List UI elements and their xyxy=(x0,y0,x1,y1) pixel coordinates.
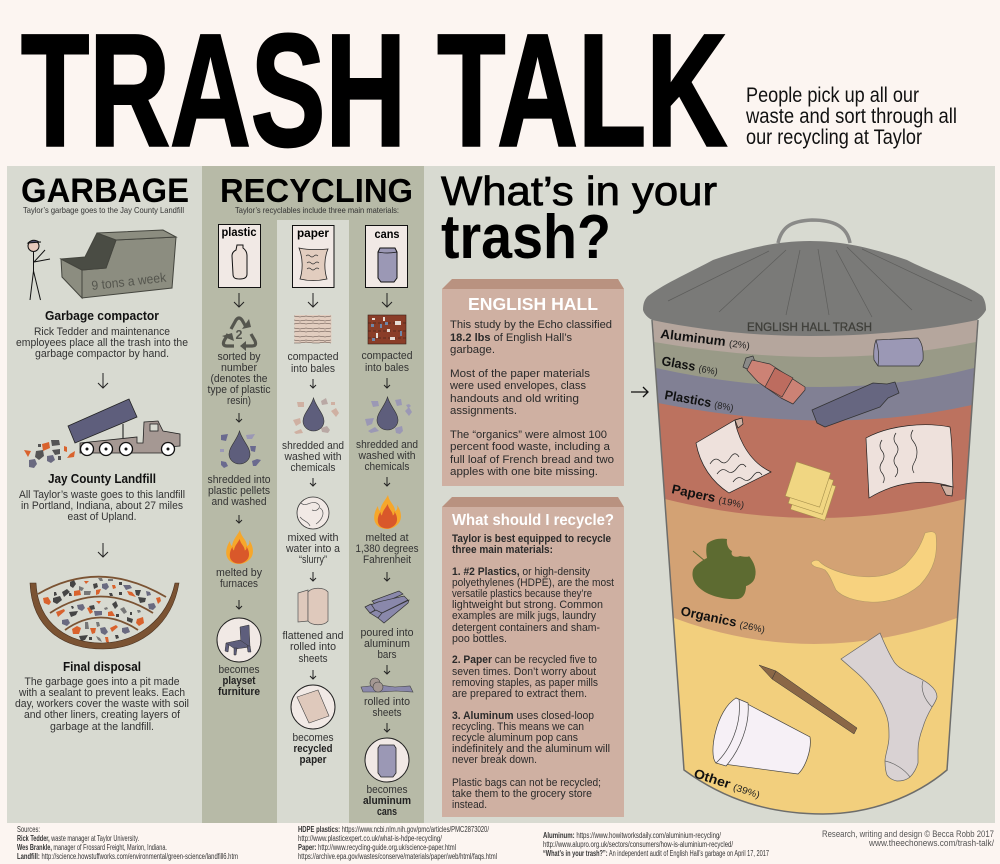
text: becomes aluminum cans: becomes xyxy=(366,784,408,796)
text: flattened: rolled into xyxy=(290,641,336,653)
column: cans xyxy=(356,226,419,818)
icon: shredding drop xyxy=(220,431,261,468)
item: pencil xyxy=(759,665,857,734)
text: recycle guide: lightweight but strong. Common xyxy=(452,599,603,611)
panel: what's in your trash xyxy=(424,166,995,823)
label: plastics: Plastics (8%) xyxy=(663,387,735,414)
heading xyxy=(441,168,717,272)
icon: garbage compactor: 9 tons a week xyxy=(91,270,167,293)
text: recycle guide: seven times. Don’t worry about xyxy=(452,666,596,678)
text: study: This study by the Echo classified xyxy=(450,319,612,331)
heading: What’s in your xyxy=(441,168,717,214)
text: compacted: into bales xyxy=(291,363,336,375)
text: becomes playset furniture: furniture xyxy=(218,686,260,698)
recycling subtitle: Taylor’s recyclables include three main materials: xyxy=(235,205,399,215)
text: compacted xyxy=(362,350,412,374)
tagline: our recycling at Taylor xyxy=(746,126,922,149)
garbage subtitle: Taylor’s garbage goes to the Jay County Landfill xyxy=(23,205,184,215)
icon: slurry xyxy=(297,497,329,529)
text: melted: melted by xyxy=(216,567,263,579)
text: recycle guide: versatile plastics because they’re xyxy=(452,588,592,600)
item: aluminum can xyxy=(874,338,923,366)
text: shredded: shredded into xyxy=(208,474,270,486)
paper card: paper xyxy=(297,228,330,240)
icon: landfill pit xyxy=(30,577,179,649)
text: shredded: shredded and xyxy=(282,440,344,452)
column: paper xyxy=(282,226,344,766)
trash can xyxy=(640,220,990,820)
text: flattened: flattened and xyxy=(282,630,344,642)
text: recycle guide: Taylor is best equipped to recycle xyxy=(452,533,611,545)
text: study: The “organics” were almost 100 xyxy=(450,429,607,441)
item: yellow paper stack xyxy=(782,462,839,520)
text: slurry: “slurry” xyxy=(299,554,327,566)
text: final disposal: garbage at the landfill. xyxy=(50,721,154,733)
text: recycle guide xyxy=(452,533,614,811)
cans card xyxy=(366,226,408,288)
text: final disposal: Final disposal xyxy=(63,660,141,674)
text: recycle guide: never break down. xyxy=(452,754,537,766)
arrow xyxy=(98,543,108,557)
footer: aluminum sources: “What’s in your trash?”: An independent audit of English Hall’s garbage on April 17, 2017 xyxy=(543,849,769,858)
icon: paper roll xyxy=(298,588,328,625)
text: jay county landfill: Jay County Landfill xyxy=(48,472,156,486)
icon: aluminum bars xyxy=(365,591,409,623)
item: foam cup xyxy=(713,698,810,774)
text: flattened xyxy=(282,630,344,665)
text: recycle guide: 2. Paper can be recycled five to xyxy=(452,654,597,666)
text: slurry: water into a xyxy=(285,543,340,555)
footer: aluminum sources xyxy=(543,831,769,858)
text: rolled: sheets xyxy=(372,707,402,719)
text: study: assignments. xyxy=(450,405,517,417)
text: recycle guide: Plastic bags can not be recycled; xyxy=(452,777,601,789)
text: recycle guide: indefinitely and the aluminum will xyxy=(452,743,610,755)
text: study: handouts and old writing xyxy=(450,393,579,405)
text: garbage compactor: employees place all the trash into the xyxy=(16,337,188,349)
icon: recycle number 2 xyxy=(222,318,256,351)
labels xyxy=(660,326,767,801)
text: jay county landfill: All Taylor’s waste goes to this landfill xyxy=(19,489,185,501)
text: becomes aluminum cans xyxy=(363,784,411,818)
text: recycle guide: examples are milk jugs, laundry xyxy=(452,610,597,622)
icon: shredding drop xyxy=(293,398,339,434)
text: recycle guide: detergent containers and sham- xyxy=(452,622,600,634)
text: becomes recycled paper: recycled xyxy=(294,743,332,755)
footer: hdpe and paper sources: Paper: http://www.recycling-guide.org.uk/science-paper.html xyxy=(298,843,456,852)
text: poured xyxy=(360,627,414,661)
text: sorted: (denotes the xyxy=(210,373,268,385)
text: shredded: chemicals xyxy=(364,461,410,473)
text: compacted: into bales xyxy=(365,362,410,374)
text: becomes playset furniture xyxy=(218,664,260,698)
text: poured: bars xyxy=(378,649,397,661)
text: shredded xyxy=(208,474,271,508)
text: garbage compactor: Garbage compactor xyxy=(45,309,159,323)
tagline: People pick up all our xyxy=(746,84,919,107)
text: study: percent food waste, including a xyxy=(450,441,611,453)
text: becomes recycled paper: becomes xyxy=(292,732,334,744)
text: final disposal xyxy=(15,660,189,733)
arrow xyxy=(98,373,108,388)
label: glass: Glass (6%) xyxy=(660,353,719,378)
text: final disposal: and other liners, creating layers of xyxy=(24,709,181,721)
icon: flame xyxy=(226,530,253,564)
text: recycle guide: recycling. This means we can xyxy=(452,721,584,733)
text: melted xyxy=(356,532,419,566)
text: sorted xyxy=(208,351,271,407)
text: compacted: compacted xyxy=(288,351,338,363)
text: recycle guide: instead. xyxy=(452,799,487,811)
text: rolled: rolled into xyxy=(364,696,410,708)
text: study xyxy=(449,319,614,478)
text: garbage compactor xyxy=(16,309,188,360)
plastic card: plastic xyxy=(222,227,257,239)
column: plastic xyxy=(208,224,271,698)
text: melted: melted at xyxy=(366,532,408,544)
text: becomes recycled paper: paper xyxy=(300,754,327,766)
icon: rolling sheet xyxy=(361,678,413,692)
footer: credit xyxy=(822,829,994,848)
text: poured: aluminum xyxy=(364,638,410,650)
icon: garbage compactor xyxy=(61,230,176,298)
tagline: waste and sort through all xyxy=(745,105,957,128)
footer: sources: Wes Brankle, manager of Frossard Freight, Marion, Indiana. xyxy=(17,843,167,852)
text: slurry: mixed with xyxy=(288,532,338,544)
cans card: cans xyxy=(374,229,400,241)
icon: paper bale xyxy=(294,315,332,343)
text: becomes playset furniture: becomes xyxy=(218,664,260,676)
icon: shredding drop xyxy=(365,397,412,434)
text: garbage compactor: garbage compactor by hand. xyxy=(35,348,169,360)
text: final disposal: day, workers cover the waste with soil xyxy=(15,698,189,710)
text: recycle guide: recycle aluminum pop cans xyxy=(452,732,579,744)
text: shredded: shredded and xyxy=(356,439,418,451)
text: shredded: chemicals xyxy=(290,462,336,474)
text: study: apples with one bite missing. xyxy=(450,466,598,478)
text: study: garbage. xyxy=(450,344,495,356)
item: crumpled paper xyxy=(696,418,771,493)
can outline xyxy=(652,320,978,814)
icon: chair xyxy=(217,618,261,662)
panel: recycling xyxy=(202,166,424,823)
footer: hdpe and paper sources: http://www.plasticexpert.co.uk/what-is-hdpe-recycling/ xyxy=(298,834,443,843)
label: organics: Organics (26%) xyxy=(679,603,767,636)
recycling heading: RECYCLING xyxy=(220,173,413,210)
footer: aluminum sources: Aluminum: https://www.howitworksdaily.com/aluminium-recycling/ xyxy=(543,831,722,840)
text: rolled xyxy=(364,696,410,719)
footer: sources: Landfill: http://science.howstuffworks.com/environmental/green-science/landfill6.htm xyxy=(17,852,238,861)
can bands xyxy=(652,320,978,814)
text: shredded: and washed xyxy=(212,496,266,508)
footer: hdpe and paper sources: https://archive.epa.gov/wastes/conserve/materials/paper/web/html/faqs.html xyxy=(298,852,497,861)
tagline xyxy=(745,84,957,149)
text: recycle guide: are prepared to extract them. xyxy=(452,688,587,700)
text: shredded: washed with xyxy=(284,451,342,463)
text: final disposal: The garbage goes into a pit made xyxy=(24,676,180,688)
footer: sources: Sources: xyxy=(17,825,40,834)
can lid xyxy=(643,241,986,336)
text: recycle guide: removing staples, as paper mills xyxy=(452,677,599,689)
label: other: Other (39%) xyxy=(692,766,762,801)
text: jay county landfill: in Portland, Indiana, about 27 miles xyxy=(21,500,184,512)
text: shredded xyxy=(282,440,344,474)
text: melted: Fahrenheit xyxy=(363,554,411,566)
text: becomes aluminum cans: aluminum xyxy=(363,795,411,807)
item: sock xyxy=(841,633,937,781)
item: written paper xyxy=(866,425,953,498)
item: banana xyxy=(811,532,936,602)
text: recycle guide: 1. #2 Plastics, or high-density xyxy=(452,566,591,578)
text: recycle guide: 3. Aluminum uses closed-loop xyxy=(452,710,594,722)
text: recycle guide: take them to the grocery store xyxy=(452,788,592,800)
item: red bottle xyxy=(743,356,805,404)
panel: what should i recycle xyxy=(442,497,624,817)
text: recycle guide: polyethylenes (HDPE), are the most xyxy=(452,577,614,589)
text: sorted: number xyxy=(221,362,257,374)
text: becomes recycled paper xyxy=(292,732,334,766)
text: shredded: plastic pellets xyxy=(208,485,271,497)
footer: aluminum sources: http://www.alupro.org.uk/sectors/consumers/how-is-aluminium-recycled/ xyxy=(543,840,734,849)
panel: garbage xyxy=(7,166,202,823)
icon: recycle number 2: 2 xyxy=(236,328,243,342)
text: garbage compactor: Rick Tedder and maintenance xyxy=(34,326,170,338)
text: melted: 1,380 degrees xyxy=(356,543,419,555)
text: sorted: sorted by xyxy=(218,351,261,363)
item: apple xyxy=(692,539,756,599)
text: study: Most of the paper materials xyxy=(450,368,590,380)
text: recycle guide: poo bottles. xyxy=(452,633,507,645)
text: becomes playset furniture: playset xyxy=(222,675,256,687)
text: melted: furnaces xyxy=(220,578,259,590)
icon: dump truck xyxy=(24,399,180,468)
text: shredded: washed with xyxy=(358,450,416,462)
text: melted xyxy=(216,567,263,590)
icon: can bale xyxy=(368,315,406,344)
icon: aluminum can xyxy=(365,738,409,782)
text: compacted xyxy=(288,351,338,375)
text: jay county landfill xyxy=(19,472,185,523)
text: becomes aluminum cans: cans xyxy=(377,806,397,818)
panel: what should i recycle: What should I recycle? xyxy=(452,512,614,529)
item: dark bottle xyxy=(812,382,899,427)
text: jay county landfill: east of Upland. xyxy=(68,511,136,523)
paper card xyxy=(292,226,334,288)
footer: sources: Rick Tedder, waste manager at Taylor University. xyxy=(17,834,139,843)
arrow to can xyxy=(631,387,648,397)
footer: hdpe and paper sources xyxy=(298,825,497,861)
panel: english hall xyxy=(442,279,624,486)
icon: stick figure xyxy=(28,240,50,300)
icon: recycled sheet xyxy=(291,685,335,729)
text: shredded xyxy=(356,439,418,473)
heading: trash? xyxy=(441,203,611,272)
text: compacted: compacted xyxy=(362,350,412,362)
text: sorted: type of plastic xyxy=(208,384,271,396)
garbage heading: GARBAGE xyxy=(21,172,189,210)
label: aluminum: Aluminum (2%) xyxy=(660,326,751,352)
can handle xyxy=(778,220,850,243)
text: study: full loaf of French bread and two xyxy=(450,454,614,466)
text: sorted: resin) xyxy=(227,395,251,407)
text: recycle guide: three main materials: xyxy=(452,544,553,556)
icon: flame xyxy=(374,495,401,529)
text: poured: poured into xyxy=(360,627,414,639)
text: study: were used envelopes, class xyxy=(449,380,586,392)
text: study: 18.2 lbs of English Hall’s xyxy=(450,332,572,344)
text: final disposal: with a sealant to prevent leaks. Each xyxy=(18,687,185,699)
text: slurry xyxy=(285,532,340,566)
footer: sources xyxy=(17,825,238,861)
footer: hdpe and paper sources: HDPE plastics: https://www.ncbi.nlm.nih.gov/pmc/articles/PMC2873020/ xyxy=(298,825,490,834)
panel: english hall: ENGLISH HALL xyxy=(468,294,598,314)
text: flattened: sheets xyxy=(298,653,328,665)
can lid: ENGLISH HALL TRASH xyxy=(747,320,872,334)
label: papers: Papers (19%) xyxy=(670,481,746,511)
plastic card xyxy=(218,224,260,288)
